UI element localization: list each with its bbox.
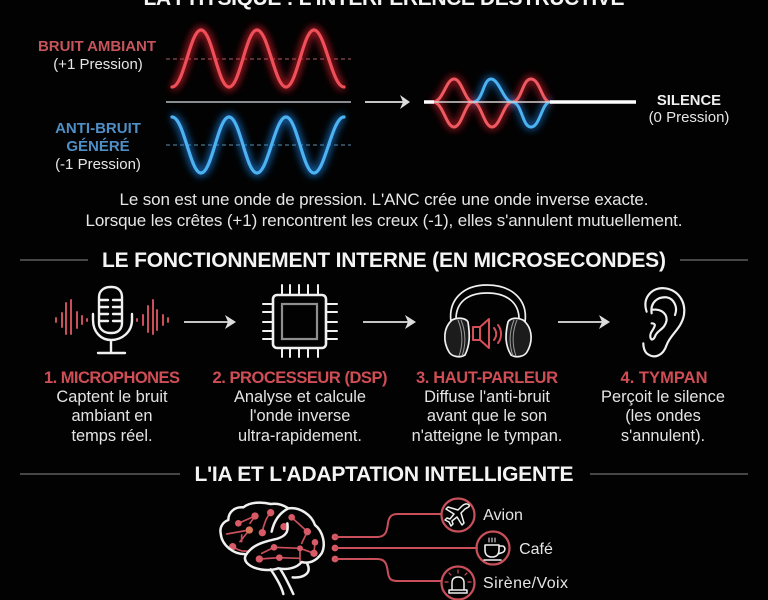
label: plane: Avion xyxy=(483,507,523,524)
step 2: processor xyxy=(212,369,388,445)
label: anti-noise: (-1 Pression) xyxy=(55,156,141,173)
heading: internal operation: LE FONCTIONNEMENT INTERNE (EN MICROSECONDES) xyxy=(102,249,666,272)
label: silence: SILENCE xyxy=(657,93,721,109)
step 3: speaker: Diffuse l'anti-bruit xyxy=(424,388,550,406)
chart: cancelled wave and silence line xyxy=(424,79,636,127)
step 3: speaker: avant que le son xyxy=(427,407,547,425)
label: anti-noise: GÉNÉRÉ xyxy=(66,138,130,155)
label: ambient noise: BRUIT AMBIANT xyxy=(38,38,156,55)
label: ambient noise: (+1 Pression) xyxy=(53,56,143,73)
step 2: processor: Analyse et calcule xyxy=(234,388,366,406)
icon: microphone xyxy=(56,287,168,353)
chart: blue anti-noise wave xyxy=(166,117,351,173)
explanatory text: Lorsque les crêtes (+1) rencontrent les creux (-1), elles s'annulent mutuellement. xyxy=(86,211,682,230)
arrow: step 3 to 4 xyxy=(558,315,610,329)
icon: plane xyxy=(442,498,474,532)
connectors: brain to sounds xyxy=(332,514,477,581)
icon: coffee cup xyxy=(476,532,510,564)
step 4: eardrum: s'annulent). xyxy=(621,427,705,445)
step 4: eardrum xyxy=(601,369,725,445)
label: cafe: Café xyxy=(519,541,553,558)
step 4: eardrum: (les ondes xyxy=(625,407,701,425)
label: anti-noise xyxy=(55,120,141,173)
step 3: speaker: 3. HAUT-PARLEUR xyxy=(416,369,558,387)
label: silence: (0 Pression) xyxy=(649,109,729,126)
icon: siren xyxy=(442,566,474,600)
step 1: microphones: temps réel. xyxy=(71,427,153,445)
divider line xyxy=(166,101,351,103)
explanatory text: Le son est une onde de pression. L'ANC crée une onde inverse exacte. xyxy=(120,190,648,209)
step 4: eardrum: Perçoit le silence xyxy=(601,388,725,406)
step 1: microphones: ambiant en xyxy=(71,407,153,425)
label: silence xyxy=(649,93,729,126)
step 3: speaker: n'atteigne le tympan. xyxy=(412,427,562,445)
arrow: step 2 to 3 xyxy=(363,315,416,329)
heading: AI and adaptation: L'IA ET L'ADAPTATION INTELLIGENTE xyxy=(194,463,574,486)
label: ambient noise xyxy=(38,38,156,73)
arrow: to result xyxy=(365,95,410,109)
icon: headphones with speaker xyxy=(445,285,531,357)
step 4: eardrum: 4. TYMPAN xyxy=(620,369,708,387)
icon: brain xyxy=(220,503,324,594)
step 1: microphones: 1. MICROPHONES xyxy=(44,369,180,387)
step 1: microphones: Captent le bruit xyxy=(56,388,168,406)
icon: ear xyxy=(643,288,684,356)
explanatory text xyxy=(86,190,682,230)
step 2: processor: ultra-rapidement. xyxy=(238,427,362,445)
arrow: step 1 to 2 xyxy=(184,315,236,329)
step 2: processor: 2. PROCESSEUR (DSP) xyxy=(212,369,388,387)
label: siren or voice: Sirène/Voix xyxy=(483,575,568,592)
step 1: microphones xyxy=(44,369,180,445)
icon: processor chip xyxy=(263,285,337,357)
step 3: speaker xyxy=(412,369,562,445)
chart: red noise wave xyxy=(166,30,351,87)
step 2: processor: l'onde inverse xyxy=(250,407,350,425)
label: anti-noise: ANTI-BRUIT xyxy=(55,120,141,137)
